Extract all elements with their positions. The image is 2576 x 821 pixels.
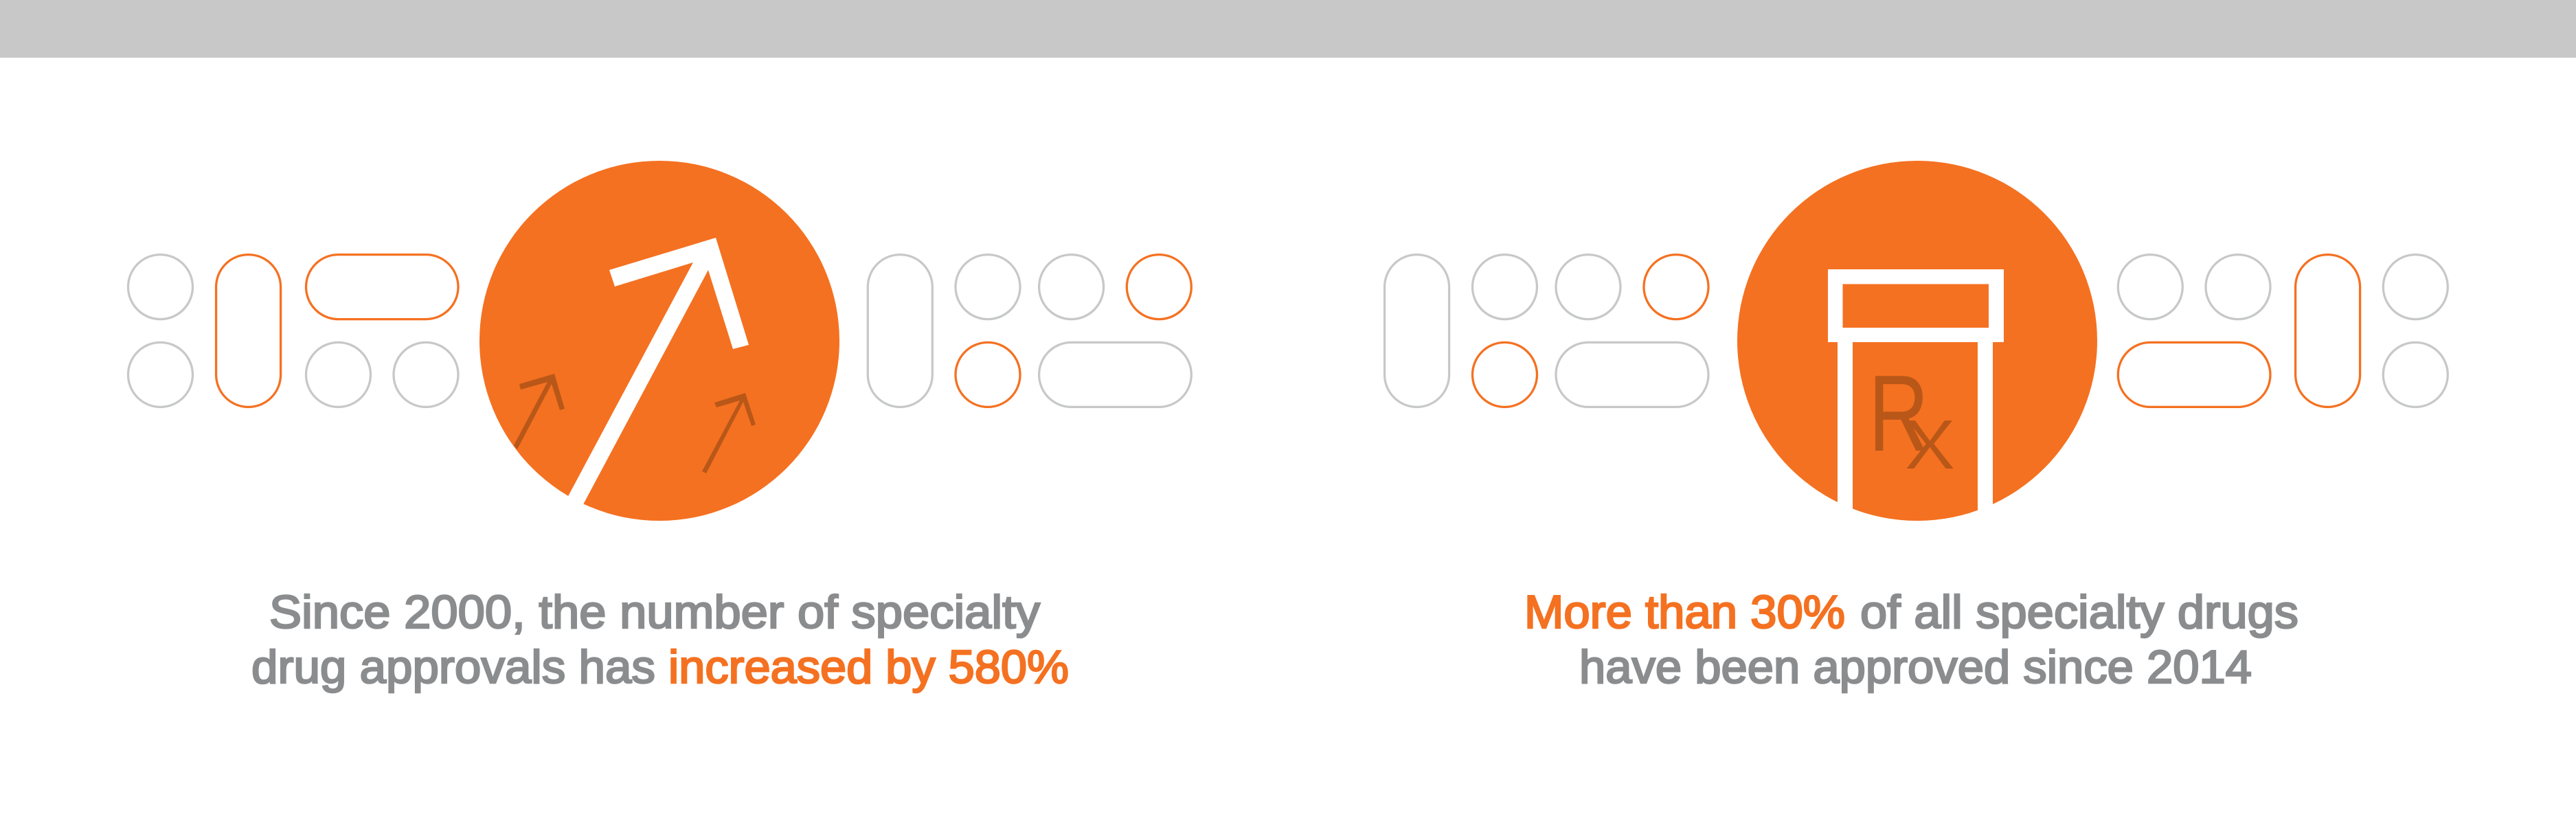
pills: left group xyxy=(1385,255,1708,407)
caption: approvals: drug approvals has xyxy=(251,641,655,693)
top grey band xyxy=(0,0,2576,58)
icon: Rx label xyxy=(1868,352,1957,490)
pills: right group xyxy=(868,255,1191,407)
caption: recent approvals: of all specialty drugs xyxy=(1860,586,2298,638)
caption: recent approvals: have been approved since 2014 xyxy=(1579,641,2252,693)
icon: large white arrow xyxy=(556,238,749,528)
panel: recent approvals xyxy=(1385,161,2448,693)
icon: small dark arrow right xyxy=(702,393,756,473)
pills: right group xyxy=(2118,255,2448,407)
caption: approvals: Since 2000, the number of specialty xyxy=(269,586,1040,638)
orange circle xyxy=(479,161,839,521)
icon: Rx label: R xyxy=(1868,352,1929,474)
pills: left group xyxy=(128,255,458,407)
orange circle xyxy=(1737,161,2097,521)
caption: approvals: increased by 580% xyxy=(668,641,1069,693)
icon: white prescription bottle xyxy=(1828,269,2004,528)
caption: recent approvals: More than 30% xyxy=(1524,586,1845,638)
icon: small dark arrow left xyxy=(514,374,565,449)
caption: approvals xyxy=(251,586,1069,693)
icon: Rx label: x xyxy=(1903,385,1957,490)
caption: recent approvals xyxy=(1524,586,2298,693)
panel: approvals increase xyxy=(128,161,1191,693)
